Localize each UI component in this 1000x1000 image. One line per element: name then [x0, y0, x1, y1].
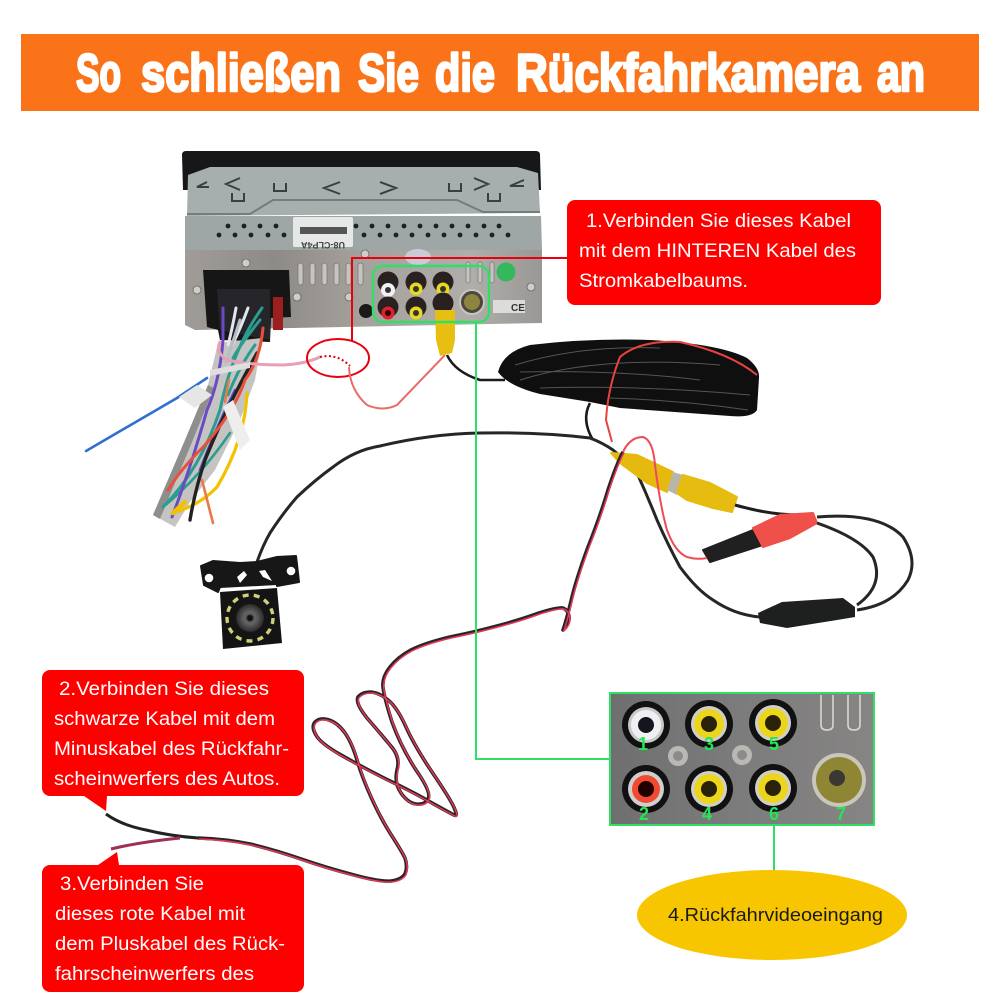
green leader line to detail panel — [476, 322, 610, 759]
title banner: Rückfahrkamera — [516, 44, 860, 103]
jack numbers: 7 — [836, 804, 846, 824]
jack 1 white — [622, 701, 670, 749]
callout 2: Minuskabel des Rückfahr- — [54, 738, 289, 760]
title banner: schließen — [141, 44, 341, 103]
jack 6 yellow — [749, 764, 797, 812]
camera video cable — [257, 433, 760, 617]
callout 3 — [42, 852, 304, 992]
jack numbers — [638, 734, 846, 824]
callout 1 — [567, 200, 881, 305]
yellow video plug at radio — [435, 310, 505, 380]
red marker ellipse with dotted link — [307, 339, 369, 377]
callout 3: dem Pluskabel des Rück- — [55, 933, 285, 955]
callout 2 — [42, 670, 304, 811]
callout 3: fahrscheinwerfers des — [55, 963, 254, 985]
jack numbers: 6 — [769, 804, 779, 824]
callout 1: mit dem HINTEREN Kabel des — [579, 240, 856, 262]
title banner: So — [76, 44, 121, 103]
socket 7 — [812, 753, 866, 807]
callout 3: 3.Verbinden Sie — [60, 873, 204, 895]
RCA detail panel — [610, 693, 874, 825]
title banner: die — [435, 44, 495, 103]
title banner — [21, 34, 979, 111]
jack numbers: 2 — [639, 804, 649, 824]
red and black power wire — [106, 437, 707, 882]
green leader line to video input label — [773, 825, 775, 872]
jack numbers: 4 — [702, 804, 712, 824]
jack 4 yellow — [685, 765, 733, 813]
video input label: 4.Rückfahrvideoeingang — [668, 904, 883, 925]
callout 1: 1.Verbinden Sie dieses Kabel — [586, 210, 851, 232]
wiring harness connector — [203, 270, 291, 342]
jack numbers: 1 — [638, 734, 648, 754]
title banner: Sie — [358, 44, 419, 103]
car radio rear view — [182, 151, 542, 330]
jack 2 red — [622, 765, 670, 813]
car radio rear view: CE — [511, 303, 525, 314]
jack 3 yellow — [685, 700, 733, 748]
cable coil — [498, 340, 759, 442]
wiring harness wires — [86, 308, 320, 527]
rear view camera — [201, 556, 299, 649]
callout 1: Stromkabelbaums. — [579, 270, 748, 292]
yellow RCA connector — [611, 453, 800, 515]
jack numbers: 3 — [704, 734, 714, 754]
callout 2: schwarze Kabel mit dem — [54, 708, 275, 730]
callout 3: dieses rote Kabel mit — [55, 903, 246, 925]
red and black power connector — [703, 513, 817, 562]
jack numbers: 5 — [769, 734, 779, 754]
red leader line from callout 1 — [352, 258, 567, 341]
red power lead to plug — [349, 355, 445, 408]
jack 5 yellow — [749, 699, 797, 747]
callout 2: 2.Verbinden Sie dieses — [59, 678, 269, 700]
callout 2: scheinwerfers des Autos. — [54, 768, 280, 790]
green highlight around RCA jacks — [373, 266, 489, 322]
inline module and branch cables — [758, 516, 912, 628]
video input label — [637, 870, 907, 960]
car radio rear view: U8-CLP4A — [301, 240, 345, 250]
title banner: an — [877, 44, 925, 103]
